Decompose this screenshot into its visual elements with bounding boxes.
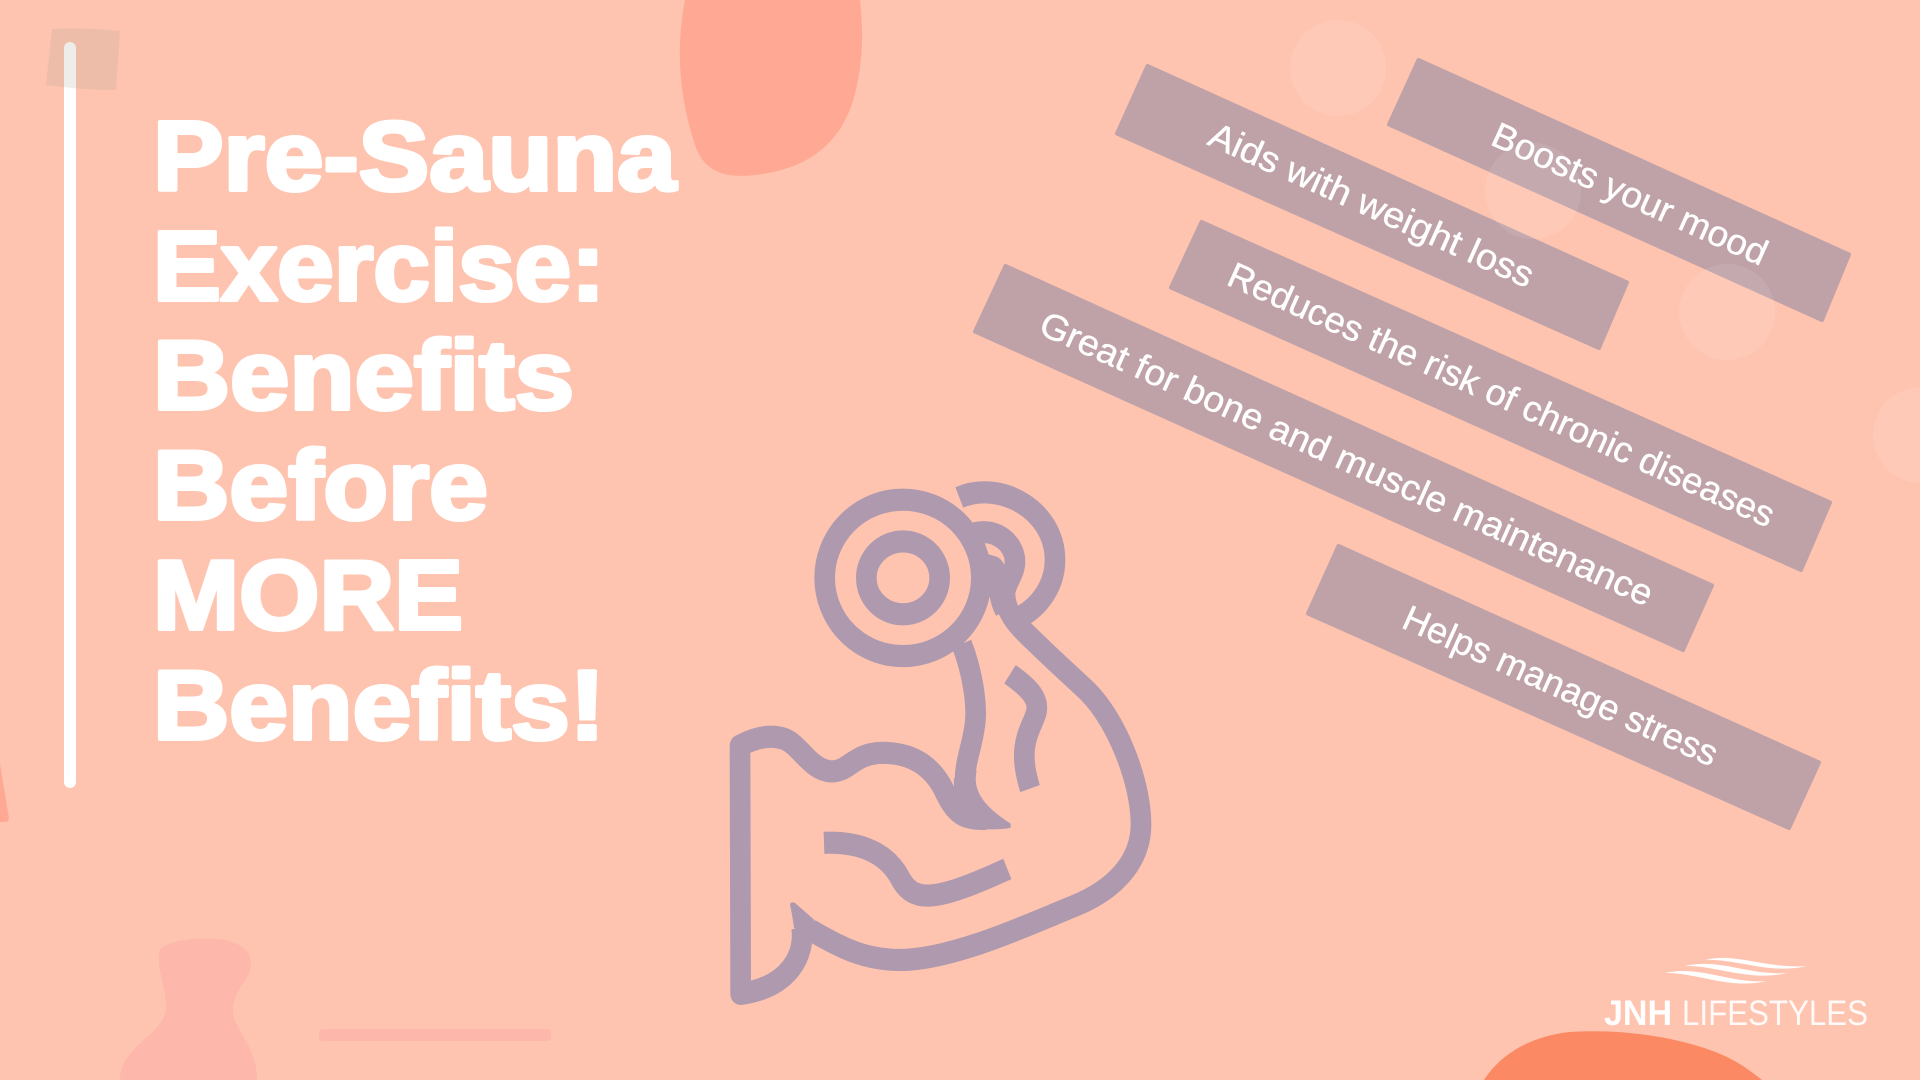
title: Benefits <box>153 320 574 430</box>
benefit banner: Reduces the risk of chronic diseases: Reduces the risk of chronic diseases <box>1222 254 1781 535</box>
benefit banner: Aids with weight loss <box>1117 66 1627 348</box>
title: MORE <box>153 540 463 650</box>
benefit banner: Reduces the risk of chronic diseases <box>1171 222 1830 570</box>
decorative translucent circles <box>1290 20 1920 483</box>
benefit banner: Helps manage stress: Helps manage stress <box>1397 597 1725 774</box>
blob: bottom right <box>1484 1031 1762 1080</box>
white vertical bar <box>64 42 76 788</box>
blob: top centre <box>680 0 862 176</box>
blob: left edge sliver <box>0 764 9 822</box>
blob: bottom left vase <box>120 938 257 1080</box>
benefit banner: Helps manage stress <box>1308 546 1819 828</box>
translucent square <box>46 28 120 90</box>
title: Before <box>153 430 488 540</box>
benefit banner: Aids with weight loss: Aids with weight loss <box>1203 114 1541 296</box>
benefit banner: Great for bone and muscle maintenance <box>975 266 1712 650</box>
title: Exercise: <box>153 211 605 321</box>
title: Pre-Sauna <box>153 101 678 211</box>
benefit banner: Great for bone and muscle maintenance: Great for bone and muscle maintenance <box>1034 303 1660 614</box>
benefit banner: Boosts your mood <box>1389 60 1849 320</box>
benefit banner: Boosts your mood: Boosts your mood <box>1486 114 1774 273</box>
icon: flexed arm with dumbbell <box>740 492 1141 994</box>
decorative bar: bottom <box>319 1029 551 1041</box>
logo: JNH Lifestyles <box>1604 958 1868 1033</box>
logo: JNH Lifestyles: JNH <box>1604 994 1672 1033</box>
title: Benefits! <box>153 650 605 760</box>
title <box>153 101 678 760</box>
logo: JNH Lifestyles: LIFESTYLES <box>1682 994 1868 1033</box>
